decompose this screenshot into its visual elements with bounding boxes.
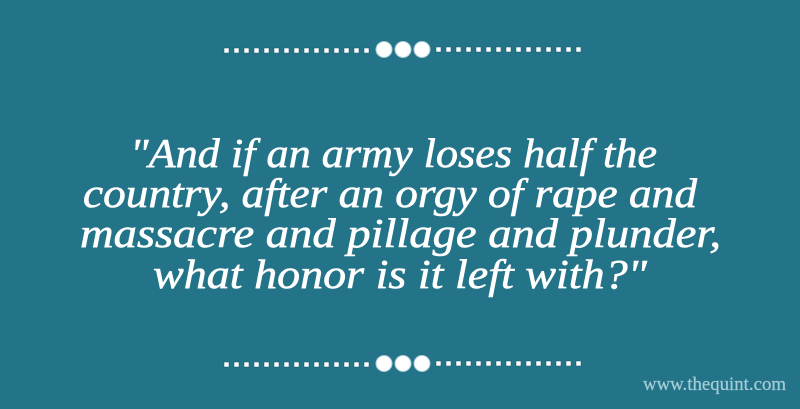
quote text: country, after an orgy of rape and: [83, 170, 698, 216]
quote text: [80, 130, 721, 297]
watermark: www.thequint.com: www.thequint.com: [643, 374, 786, 395]
quote text: "And if an army loses half the: [130, 130, 657, 176]
quote text: massacre and pillage and plunder,: [80, 210, 721, 256]
bottom dotted divider with three circles: [224, 356, 581, 372]
quote text: what honor is it left with?": [153, 251, 648, 297]
top dotted divider with three circles: [224, 42, 581, 58]
